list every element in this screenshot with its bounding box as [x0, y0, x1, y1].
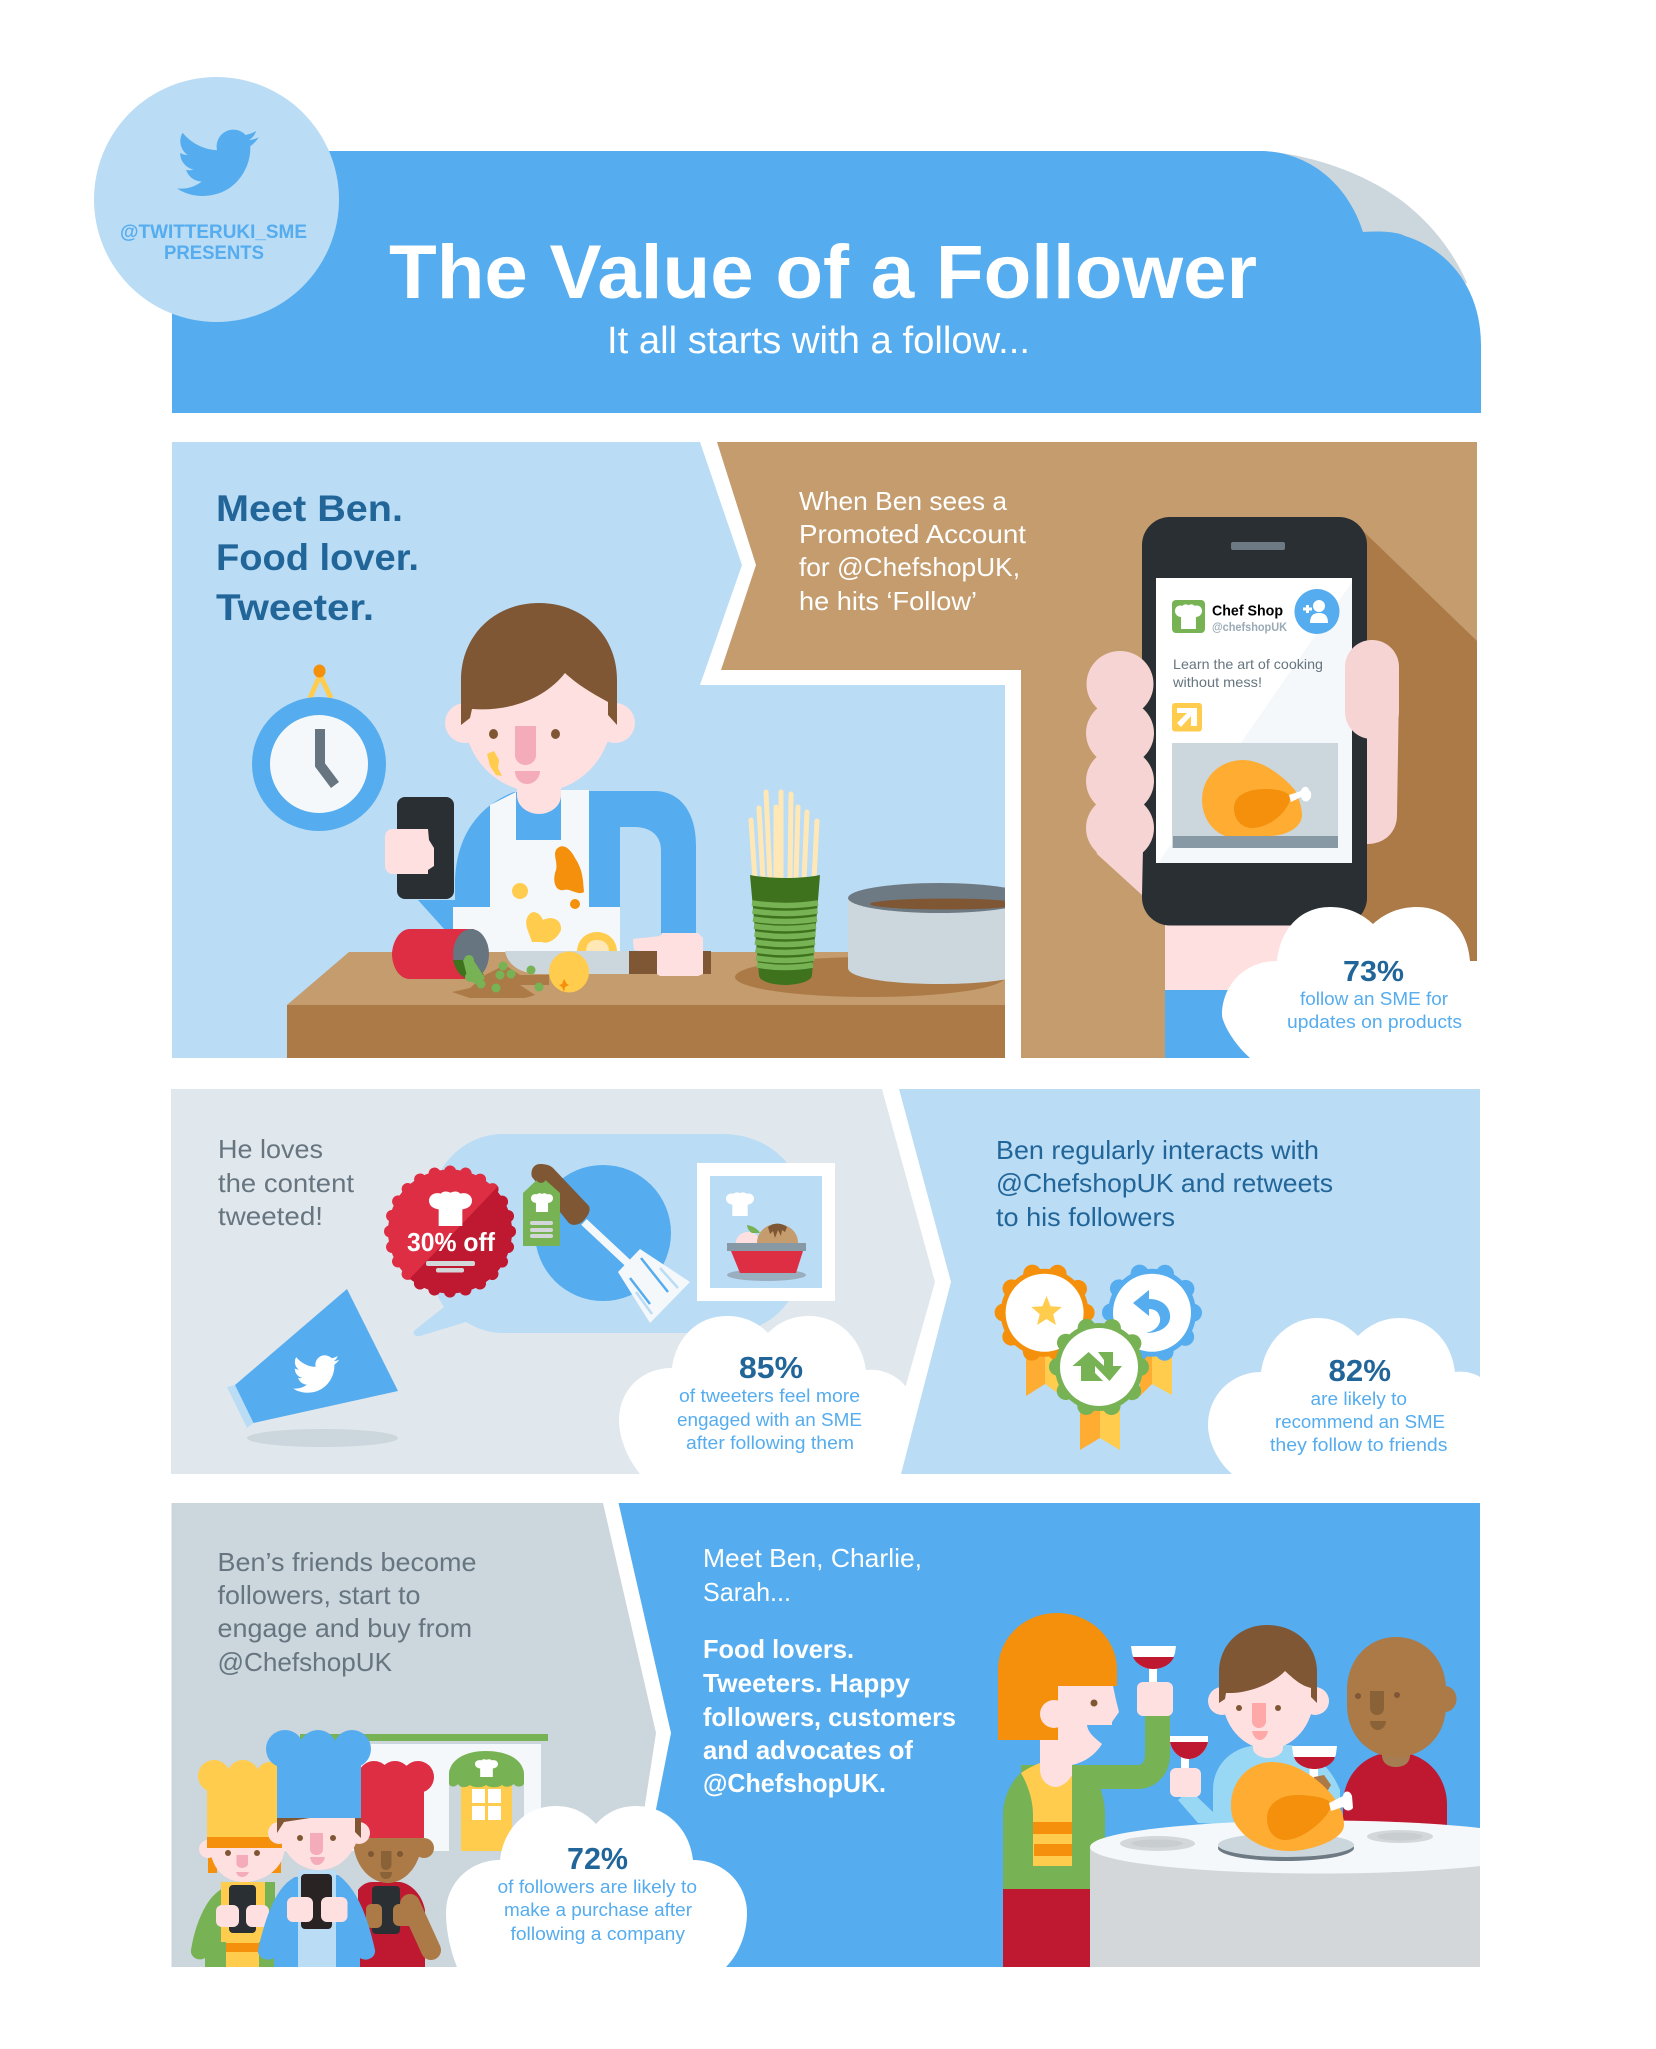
discount badge	[388, 1170, 512, 1294]
phone screen	[1156, 578, 1352, 863]
wine glass: middle	[1170, 1736, 1208, 1797]
stat cloud: 73%: updates on products	[1287, 1012, 1462, 1032]
icon: wall clock	[252, 664, 386, 831]
character: red hat chef	[350, 1761, 434, 1967]
text: food lovers: @ChefshopUK.	[703, 1768, 886, 1798]
wine glass: right	[1292, 1746, 1337, 1795]
text: food lovers: followers, customers	[703, 1702, 956, 1732]
stat cloud: 72%: of followers are likely to	[498, 1877, 697, 1897]
character: woman with glass	[998, 1613, 1176, 1967]
fingers	[1086, 640, 1399, 895]
ribbon: centre	[1080, 1400, 1120, 1450]
title: The Value of a Follower	[389, 230, 1257, 315]
panel: Ben interacts	[899, 1089, 1480, 1474]
heading: meet Ben	[216, 488, 419, 628]
text: when Ben sees: for @ChefshopUK,	[799, 552, 1020, 582]
icon: follow button	[1294, 589, 1340, 634]
speech bubble	[414, 1134, 797, 1336]
stat cloud: 73%: 73%	[1343, 956, 1404, 988]
roast turkey	[1231, 1762, 1353, 1851]
stat cloud: 85%: of tweeters feel more	[679, 1386, 860, 1406]
discount badge: 30% off	[407, 1227, 495, 1257]
stat cloud: 72%	[446, 1806, 747, 1967]
rosette ribbons	[1026, 1350, 1172, 1396]
character: middle friend	[1178, 1625, 1340, 1830]
spatula	[531, 1164, 690, 1323]
text: when Ben sees: Promoted Account	[799, 519, 1027, 549]
heading: meet Ben: Food lover.	[216, 537, 419, 578]
presents text: PRESENTS	[164, 243, 264, 264]
heading: meet Ben: Meet Ben.	[216, 488, 403, 529]
text: when Ben sees: he hits ‘Follow’	[799, 586, 977, 616]
text: Ben interacts: @ChefshopUK and retweets	[996, 1168, 1333, 1198]
handle text: @TWITTERUKI_SME	[120, 222, 307, 243]
text: Ben interacts: to his followers	[996, 1202, 1175, 1232]
megaphone	[227, 1289, 398, 1428]
phone	[1142, 517, 1367, 926]
text: when Ben sees	[799, 486, 1027, 616]
text: Ben's friends: followers, start to	[218, 1580, 420, 1610]
heading: meet Ben: Tweeter.	[216, 587, 374, 628]
icon: twitter bird	[177, 130, 259, 196]
stat cloud: 85%: 85%	[739, 1350, 803, 1385]
rosette: retweet	[1055, 1323, 1143, 1411]
character: right friend	[1343, 1637, 1456, 1835]
character: yellow hat chef	[191, 1760, 285, 1967]
panel: friends become followers	[172, 1503, 656, 1967]
shop building	[280, 1734, 548, 1851]
text: meet friends: Meet Ben, Charlie,	[703, 1543, 922, 1573]
dining table	[1090, 1820, 1480, 1967]
character: Ben cooking	[385, 603, 696, 952]
text: food lovers	[703, 1634, 956, 1798]
text: meet friends: Sarah...	[703, 1577, 791, 1607]
tweet text	[1172, 656, 1323, 690]
text: he loves	[218, 1134, 355, 1231]
panel: meet Ben	[172, 442, 1030, 1058]
account name: Chef Shop	[1212, 602, 1283, 620]
lemon	[549, 952, 589, 992]
text: he loves: the content	[218, 1168, 355, 1198]
lemon half	[577, 932, 617, 952]
tweet text: without mess!	[1172, 674, 1262, 690]
framed photo: dessert	[697, 1163, 835, 1301]
pot with shadow	[735, 883, 1030, 997]
icon: twitter bird white	[293, 1355, 339, 1393]
subtitle: It all starts with a follow...	[607, 320, 1030, 362]
text: food lovers: Food lovers.	[703, 1634, 854, 1664]
rosette: star	[1001, 1269, 1089, 1357]
knife	[505, 933, 711, 976]
stat cloud: 72%: 72%	[567, 1841, 628, 1876]
panel: he loves the content	[171, 1089, 935, 1474]
text: meet friends	[703, 1543, 922, 1607]
phone shadow	[1330, 530, 1477, 1058]
account handle: @chefshopUK	[1212, 620, 1287, 634]
text: when Ben sees: When Ben sees a	[799, 486, 1008, 516]
blue circle	[535, 1165, 671, 1301]
tweet image: roast turkey	[1172, 743, 1338, 848]
icon: link arrow	[1172, 703, 1202, 732]
arm	[1165, 920, 1345, 1058]
price tag	[523, 1173, 560, 1246]
stat cloud: 82%	[1208, 1318, 1480, 1474]
text: Ben's friends	[218, 1547, 476, 1677]
character: blue hat chef	[258, 1730, 375, 1967]
stat cloud: 72%: make a purchase after	[504, 1900, 692, 1920]
text: he loves: He loves	[218, 1134, 323, 1164]
text: Ben interacts	[996, 1135, 1333, 1232]
spaghetti jar	[750, 792, 820, 985]
award rosettes	[1001, 1269, 1196, 1450]
text: he loves: tweeted!	[218, 1201, 323, 1231]
header banner	[172, 151, 1481, 413]
stat cloud: 73%: follow an SME for	[1300, 989, 1448, 1009]
palm	[1367, 690, 1399, 844]
stat cloud: 82%: they follow to friends	[1270, 1435, 1448, 1455]
text: food lovers: Tweeters. Happy	[703, 1668, 911, 1698]
text: Ben's friends: Ben’s friends become	[218, 1547, 476, 1577]
circle badge: Twitter UK SME presents	[94, 77, 339, 322]
panel: meet Ben, Charlie, Sarah	[618, 1503, 1550, 1967]
stat cloud: 82%: recommend an SME	[1275, 1412, 1445, 1432]
food mess	[392, 929, 549, 998]
text: Ben's friends: @ChefshopUK	[218, 1647, 393, 1677]
stat cloud: 73%	[1222, 907, 1477, 1058]
megaphone shadow	[247, 1429, 398, 1447]
text: food lovers: and advocates of	[703, 1735, 913, 1765]
text: Ben's friends: engage and buy from	[218, 1613, 472, 1643]
stat cloud: 82%: 82%	[1328, 1353, 1391, 1388]
stat cloud: 85%	[619, 1316, 906, 1474]
panel: promoted account	[717, 442, 1477, 1058]
rosette: reply	[1108, 1269, 1196, 1357]
text: Ben interacts: Ben regularly interacts with	[996, 1135, 1319, 1165]
table	[287, 952, 1005, 1058]
stat cloud: 72%: following a company	[510, 1924, 685, 1944]
stat cloud: 85%: after following them	[686, 1433, 854, 1453]
tweet text: Learn the art of cooking	[1173, 656, 1323, 672]
stat cloud: 82%: are likely to	[1310, 1389, 1407, 1409]
stat cloud: 85%: engaged with an SME	[677, 1410, 862, 1430]
icon: chef shop logo	[1172, 600, 1205, 633]
